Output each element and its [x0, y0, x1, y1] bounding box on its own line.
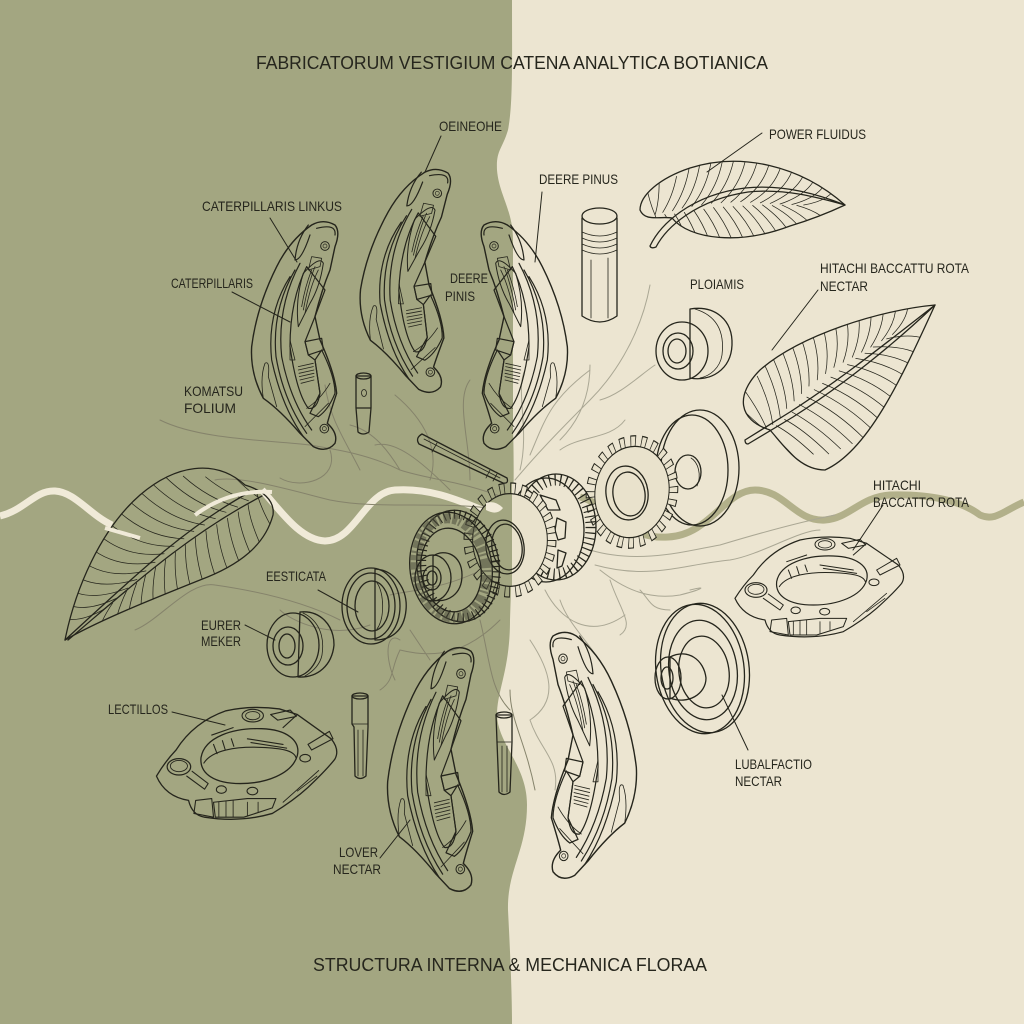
bearing: euler [267, 612, 334, 677]
bearing: ploiamis [656, 308, 732, 380]
label: komatsu folium: KOMATSU [184, 383, 243, 399]
label: lubalfactio nectar [735, 756, 812, 789]
leaf: right [742, 304, 936, 471]
pin: lower centre [496, 712, 512, 794]
gear: right [583, 410, 739, 549]
leaf: top right [639, 160, 846, 248]
caterpillar link: upper right [481, 222, 568, 449]
textured disk with hub [403, 505, 506, 629]
root network: left [135, 380, 535, 790]
label: caterpillaris: CATERPILLARIS [171, 275, 253, 291]
label: hitachi baccatto rota: BACCATTO ROTA [873, 494, 970, 510]
label: hitachi baccatto rota [873, 477, 970, 510]
label: deere pinus centre: PINIS [445, 288, 475, 304]
label: komatsu folium: FOLIUM [184, 400, 236, 416]
hatched wheel: centre [508, 474, 596, 582]
disk with hub: lower right [647, 598, 758, 739]
background: olive left panel [0, 0, 527, 1024]
label: caterpillaris linkus: CATERPILLARIS LINKUS [202, 198, 342, 214]
clamp plate: right [735, 537, 904, 637]
label: eurer meker: EURER [201, 617, 241, 633]
gear: centre [468, 488, 552, 592]
label: hitachi baccattu rota nectar [820, 260, 970, 294]
clamp plate: lower left [156, 707, 337, 819]
label: oeineohe: OEINEOHE [439, 118, 502, 134]
label: hitachi baccattu rota nectar: NECTAR [820, 278, 868, 294]
label: deere pinus: DEERE PINUS [539, 171, 618, 187]
label: deere pinus centre: DEERE [450, 270, 488, 286]
root network: right [515, 285, 835, 790]
pin: lower left [352, 693, 368, 778]
label: lubalfactio nectar: NECTAR [735, 773, 782, 789]
small pin: left upper [356, 373, 371, 434]
shaft pin: centre [418, 434, 508, 483]
label: eesticata: EESTICATA [266, 568, 327, 584]
label: power fluidus: POWER FLUIDUS [769, 126, 866, 142]
bearing: left [342, 568, 406, 644]
caterpillar link: lower centre [387, 648, 474, 891]
caterpillar link: upper left [251, 222, 338, 449]
label: ploiamis: PLOIAMIS [690, 276, 744, 292]
cylinder pin: top right [582, 208, 617, 322]
label: hitachi baccattu rota nectar: HITACHI BACCATTU ROTA [820, 260, 970, 276]
background wavy line: olive on right [580, 490, 1024, 537]
background wavy line: pale on left [0, 490, 505, 541]
label: hitachi baccatto rota: HITACHI [873, 477, 921, 493]
leader lines [172, 133, 883, 858]
label: eurer meker: MEKER [201, 633, 241, 649]
label: lubalfactio nectar: LUBALFACTIO [735, 756, 812, 772]
leaf: left [64, 468, 274, 641]
caterpillar link: lower right [550, 632, 637, 878]
label: lover nectar: NECTAR [333, 861, 381, 877]
label: eurer meker [201, 617, 241, 649]
caterpillar link: top centre [357, 167, 451, 393]
label: lover nectar [333, 844, 381, 877]
subtitle: STRUCTURA INTERNA & MECHANICA FLORAA [313, 954, 708, 975]
label: lectillos: LECTILLOS [108, 701, 168, 717]
label: komatsu folium [184, 383, 243, 416]
label: deere pinus centre [445, 270, 488, 304]
title: FABRICATORUM VESTIGIUM CATENA ANALYTICA BOTIANICA [256, 52, 769, 73]
label: lover nectar: LOVER [339, 844, 378, 860]
